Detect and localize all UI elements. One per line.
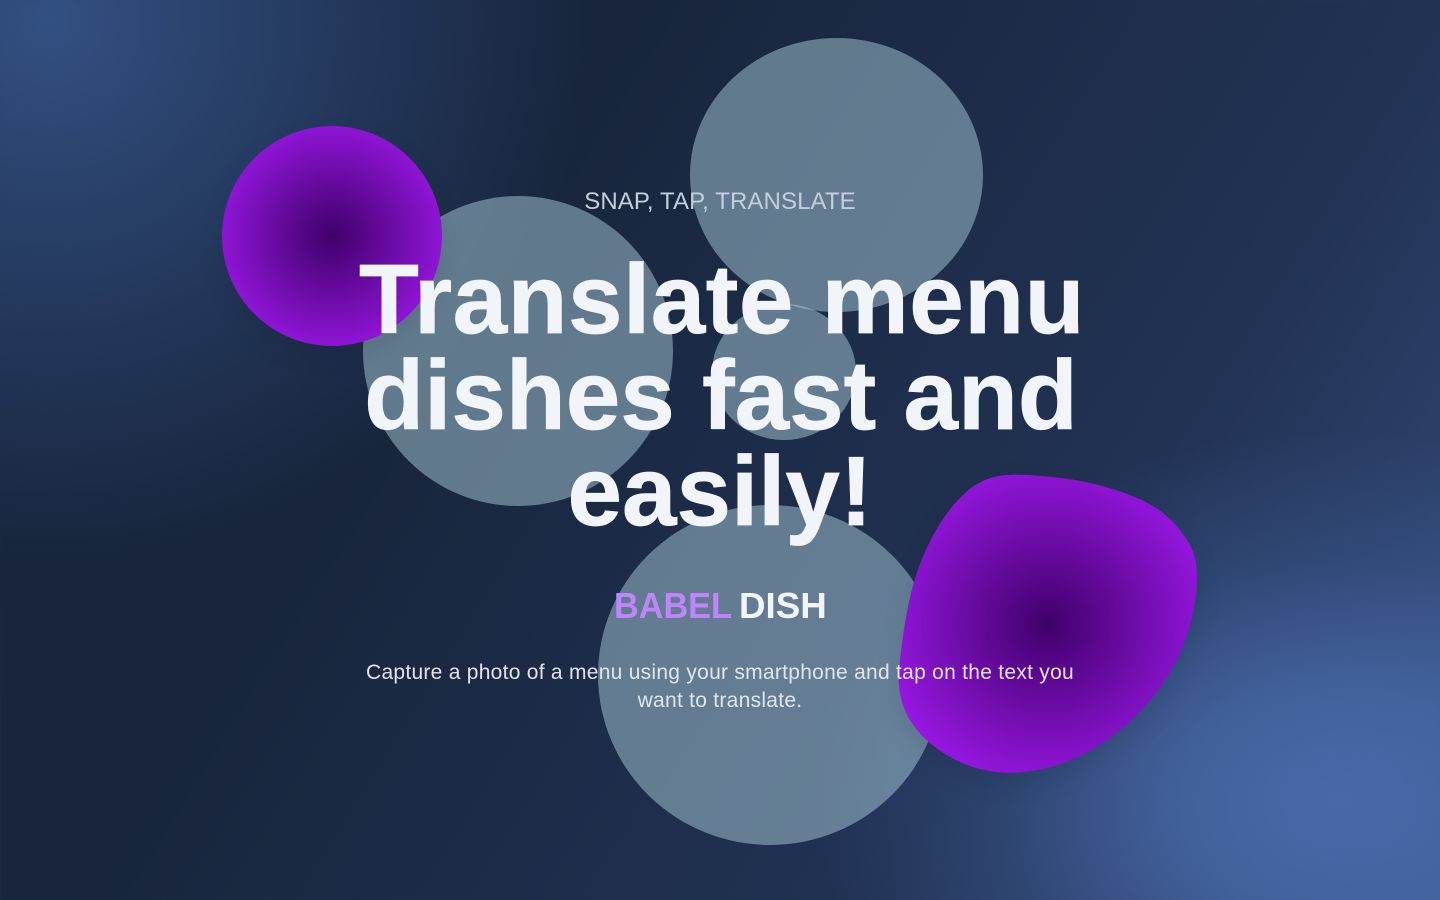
- decorative circle: bottom large: [598, 505, 942, 845]
- description line 2: want to translate.: [638, 689, 802, 712]
- purple circle: top left: [222, 126, 442, 346]
- description line 1: Capture a photo of a menu using your smartphone and tap on the text you: [366, 661, 1074, 684]
- brand name: [614, 585, 827, 626]
- title: [359, 244, 1085, 546]
- brand name: BABEL: [614, 585, 732, 626]
- eyebrow heading: SNAP, TAP, TRANSLATE: [584, 188, 856, 215]
- title line 2: dishes fast and: [364, 340, 1078, 450]
- decorative circle: upper ellipse: [690, 38, 983, 312]
- description: [366, 661, 1074, 712]
- decorative circle: left large: [363, 196, 673, 506]
- brand name: DISH: [739, 585, 827, 626]
- decorative circle: small centre: [712, 304, 856, 440]
- title line 3: easily!: [567, 436, 873, 546]
- title line 1: Translate menu: [359, 244, 1085, 354]
